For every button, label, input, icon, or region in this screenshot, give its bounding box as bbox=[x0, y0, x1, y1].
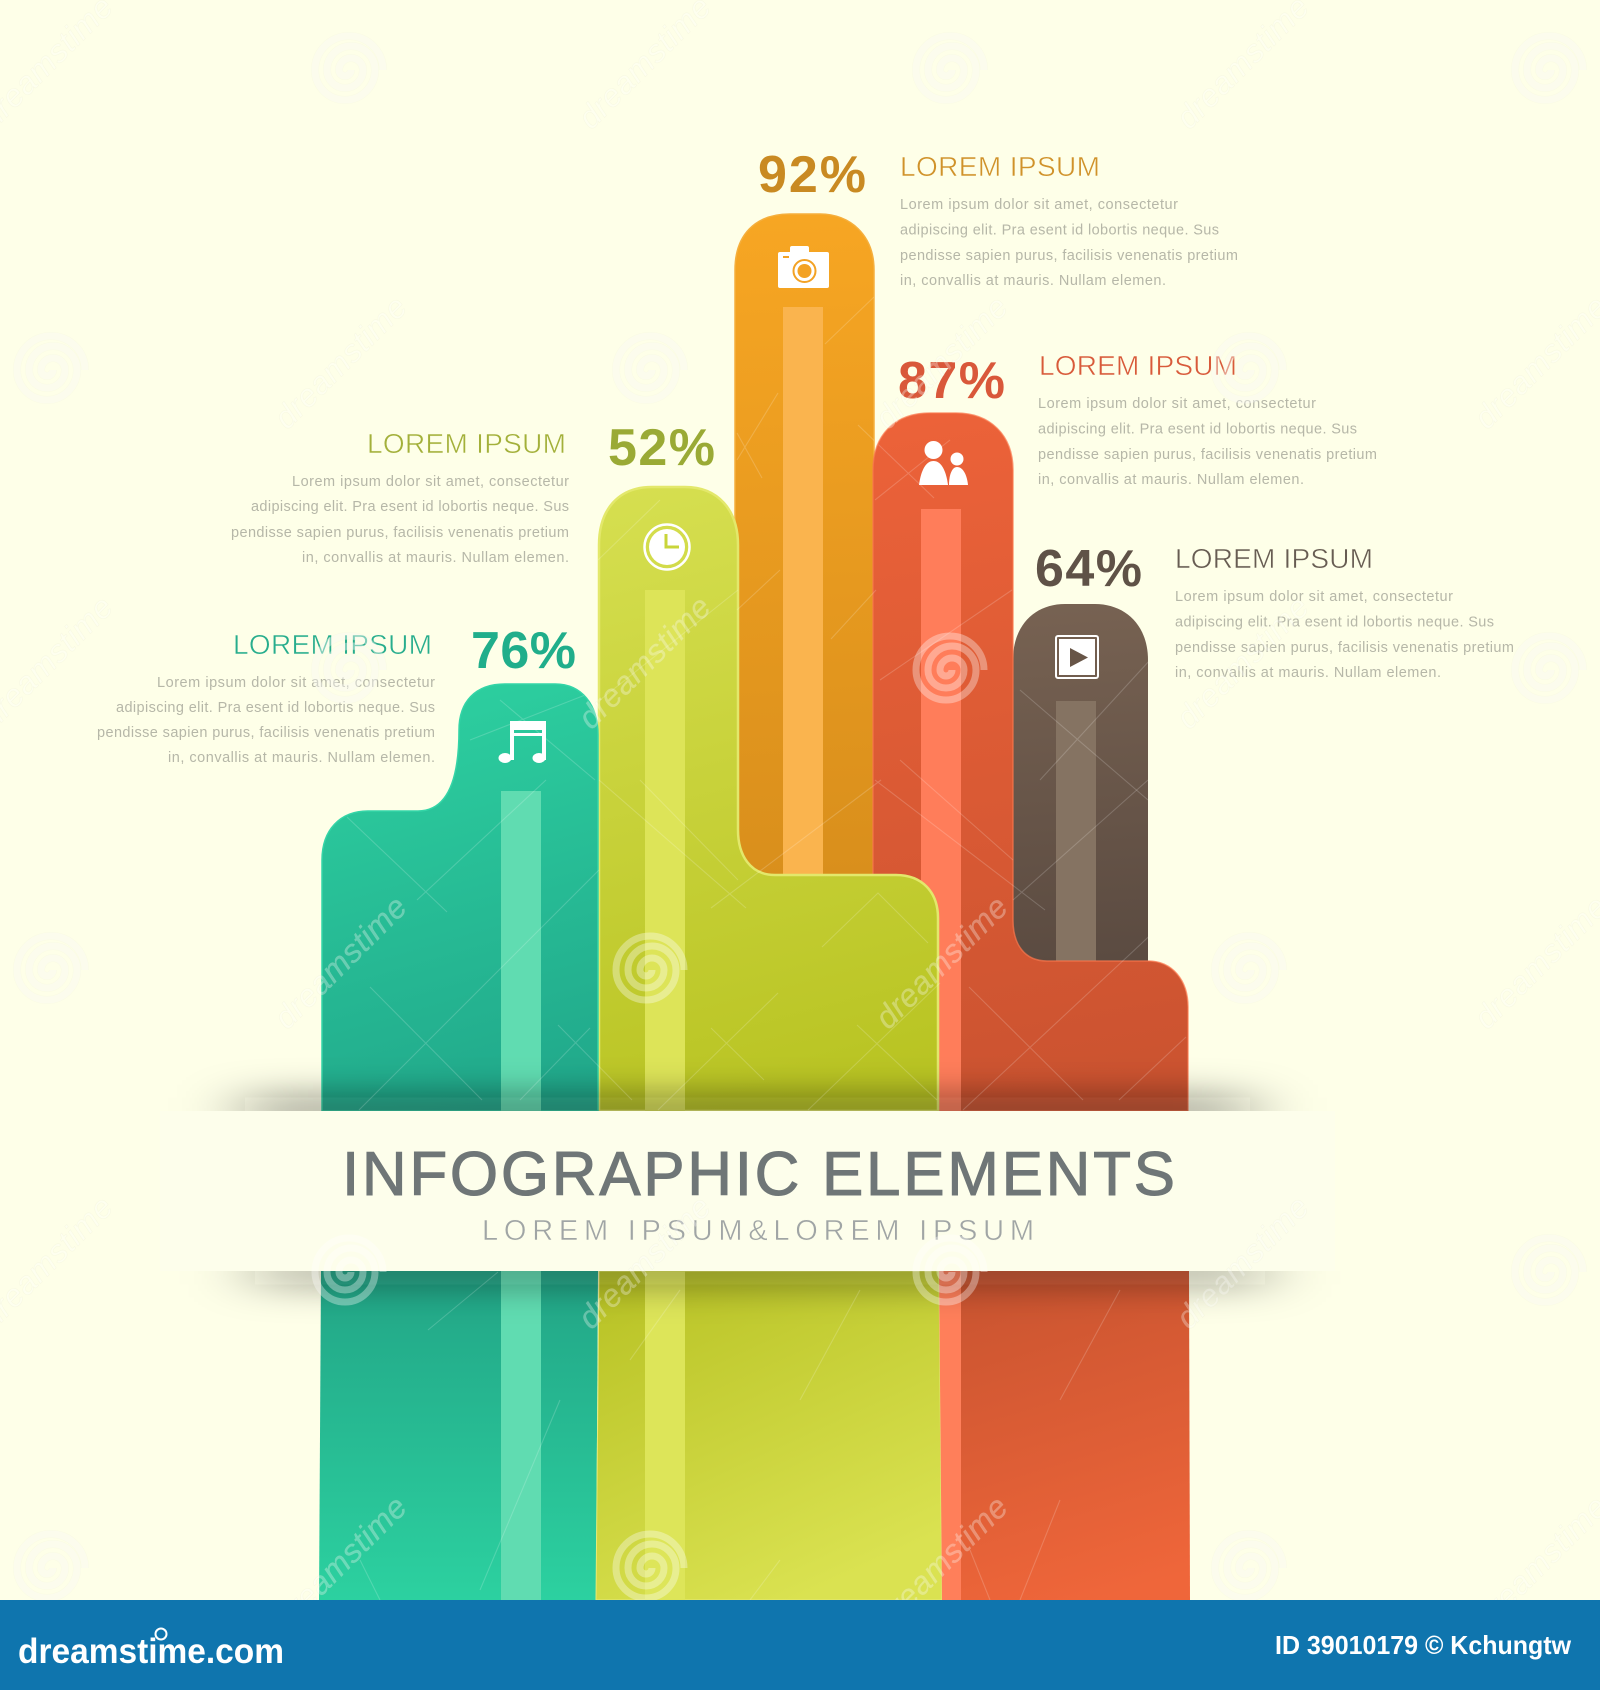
label: 64% brown: Lorem ipsum dolor sit amet, consectetur bbox=[1175, 589, 1453, 605]
label: 64% brown: 64% bbox=[1035, 540, 1142, 598]
label: 87% red: in, convallis at mauris. Nullam elemen. bbox=[1038, 472, 1304, 488]
watermark text: dreamstime bbox=[868, 1489, 1015, 1636]
bar: orange 92% bbox=[735, 214, 874, 900]
label: 92% orange: adipiscing elit. Pra esent id lobortis neque. Sus bbox=[900, 222, 1219, 238]
label: 64% brown: pendisse sapien purus, facilisis venenatis pretium bbox=[1175, 640, 1514, 656]
label: 52% lime: in, convallis at mauris. Nullam elemen. bbox=[302, 550, 569, 566]
label: 92% orange: Lorem ipsum dolor sit amet, consectetur bbox=[900, 197, 1178, 213]
bar: teal 76% bbox=[322, 684, 598, 1111]
label: 87% red: pendisse sapien purus, facilisis venenatis pretium bbox=[1038, 447, 1377, 463]
label: 76% teal: 76% bbox=[471, 622, 576, 680]
icon: music note bbox=[498, 721, 546, 763]
bar: red 87% bbox=[873, 413, 1188, 1111]
bar: brown 64% bbox=[1013, 604, 1148, 980]
label: 52% lime bbox=[231, 419, 715, 566]
panel: footer bar bbox=[0, 1600, 1600, 1690]
bar icons bbox=[498, 246, 1098, 763]
label: 76% teal: in, convallis at mauris. Nullam elemen. bbox=[168, 750, 435, 766]
watermark text: dreamstime bbox=[267, 289, 414, 436]
label: 92% orange: pendisse sapien purus, facilisis venenatis pretium bbox=[900, 248, 1238, 264]
watermark text: dreamstime bbox=[868, 889, 1015, 1036]
label: 64% brown: adipiscing elit. Pra esent id lobortis neque. Sus bbox=[1175, 614, 1494, 630]
footer logo: dreamstime.com bbox=[18, 1632, 284, 1671]
watermark text: dreamstime bbox=[868, 289, 1015, 436]
bar base: lime bbox=[596, 1271, 942, 1600]
panel: bar chart upper section bbox=[322, 214, 1188, 1111]
watermark text: dreamstime bbox=[267, 889, 414, 1036]
icon: people bbox=[919, 441, 968, 485]
icon: camera bbox=[778, 246, 829, 288]
bar: lime 52% bbox=[599, 487, 938, 1111]
label: 87% red: 87% bbox=[898, 352, 1005, 410]
label: 52% lime: 52% bbox=[608, 419, 715, 477]
label: 87% red bbox=[898, 350, 1377, 488]
label: 52% lime: Lorem ipsum dolor sit amet, consectetur bbox=[292, 474, 569, 490]
watermark text: dreamstime bbox=[267, 1489, 414, 1636]
footer image id: ID 39010179 © Kchungtw bbox=[1275, 1630, 1572, 1660]
panel: bar chart lower section bbox=[319, 1271, 1190, 1600]
subtitle: LOREM IPSUM&LOREM IPSUM bbox=[482, 1215, 1034, 1247]
label: 87% red: LOREM IPSUM bbox=[1039, 350, 1237, 381]
label: 76% teal: Lorem ipsum dolor sit amet, consectetur bbox=[157, 675, 435, 691]
icon: play button bbox=[1056, 636, 1098, 678]
label: 64% brown bbox=[1035, 540, 1514, 681]
label: 52% lime: adipiscing elit. Pra esent id lobortis neque. Sus bbox=[251, 499, 569, 515]
bar base: red bbox=[939, 1271, 1190, 1600]
watermark text: dreamstime bbox=[1169, 1189, 1316, 1336]
label: 92% orange: 92% bbox=[758, 146, 866, 204]
band shadows bbox=[245, 1096, 1265, 1286]
label: 76% teal: LOREM IPSUM bbox=[233, 629, 432, 660]
watermark text: dreamstime bbox=[571, 1189, 718, 1336]
label: 92% orange: LOREM IPSUM bbox=[900, 151, 1100, 182]
label: 87% red: Lorem ipsum dolor sit amet, consectetur bbox=[1038, 396, 1316, 412]
label: 64% brown: LOREM IPSUM bbox=[1175, 543, 1373, 574]
label: 76% teal: adipiscing elit. Pra esent id lobortis neque. Sus bbox=[116, 700, 435, 716]
bar base: teal bbox=[319, 1271, 598, 1600]
watermark text: dreamstime bbox=[1169, 589, 1316, 736]
watermark text: dreamstime bbox=[571, 589, 718, 736]
panel: title band bbox=[160, 1111, 1335, 1271]
watermark lines bbox=[347, 297, 1188, 1600]
label: 92% orange: in, convallis at mauris. Nullam elemen. bbox=[900, 273, 1166, 289]
footer logo mark bbox=[156, 1628, 166, 1640]
label: 52% lime: pendisse sapien purus, facilisis venenatis pretium bbox=[231, 525, 569, 541]
label: 52% lime: LOREM IPSUM bbox=[367, 428, 566, 459]
label: 64% brown: in, convallis at mauris. Nullam elemen. bbox=[1175, 665, 1441, 681]
label: 76% teal bbox=[97, 622, 576, 766]
title: INFOGRAPHIC ELEMENTS bbox=[342, 1140, 1175, 1209]
label: 92% orange bbox=[758, 146, 1238, 289]
icon: clock bbox=[644, 524, 690, 570]
label: 87% red: adipiscing elit. Pra esent id lobortis neque. Sus bbox=[1038, 422, 1357, 438]
label: 76% teal: pendisse sapien purus, facilisis venenatis pretium bbox=[97, 725, 435, 741]
